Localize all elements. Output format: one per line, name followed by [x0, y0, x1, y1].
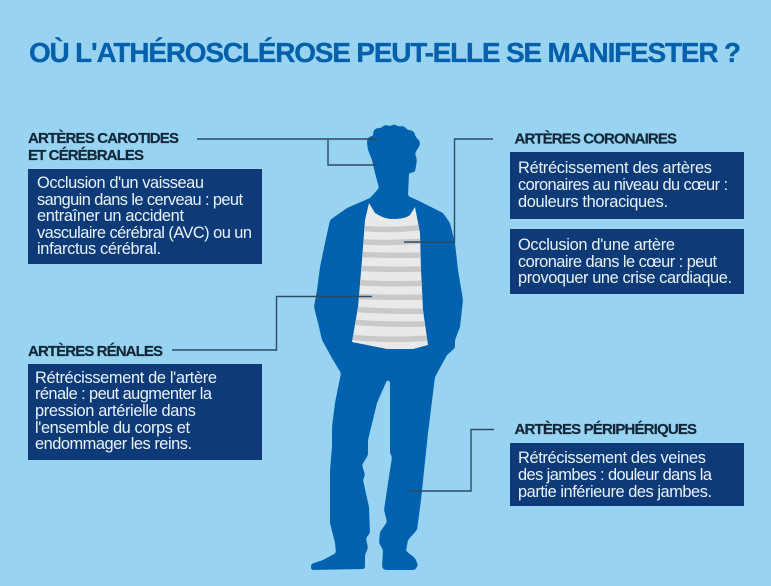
text box: carotid: vasculaire cérébral (AVC) ou un: [37, 224, 252, 242]
text box: peripheral: Rétrécissement des veines: [518, 449, 706, 467]
text box: coronary occlusion: provoquer une crise cardiaque.: [518, 269, 732, 287]
body silhouette: [311, 124, 463, 570]
heading: carotid: ET CÉRÉBRALES: [28, 147, 144, 164]
text box: renal: pression artérielle dans: [35, 402, 196, 420]
text box: peripheral: des jambes : douleur dans la: [518, 466, 713, 484]
text box: renal: l'ensemble du corps et: [35, 419, 190, 437]
heading: renal: ARTÈRES RÉNALES: [28, 343, 163, 360]
text box: renal: endommager les reins.: [35, 435, 192, 453]
human silhouette figure: [311, 124, 463, 570]
text box: carotid: entraîner un accident: [37, 207, 184, 225]
heading: coronary: ARTÈRES CORONAIRES: [514, 130, 677, 148]
text box: carotid: [28, 169, 262, 264]
panel: coronary arteries: [510, 130, 744, 294]
heading: carotid: ARTÈRES CAROTIDES: [28, 130, 179, 147]
connector: carotid arteries: [197, 139, 378, 165]
text box: coronary occlusion: [510, 229, 744, 294]
heading: carotid: [28, 130, 179, 164]
text box: renal: [28, 364, 262, 460]
text box: peripheral: partie inférieure des jambes.: [518, 483, 712, 501]
text box: renal: rénale : peut augmenter la: [35, 385, 213, 403]
panel: renal arteries: [28, 343, 262, 460]
panel: peripheral arteries: [510, 421, 744, 506]
connector: peripheral arteries: [407, 430, 494, 491]
title: OÙ L'ATHÉROSCLÉROSE PEUT-ELLE SE MANIFESTER ?: [29, 37, 741, 68]
text box: peripheral: [510, 443, 744, 506]
text box: carotid: sanguin dans le cerveau : peut: [37, 191, 243, 209]
striped shirt: [352, 203, 428, 349]
text box: coronary occlusion: Occlusion d'une artère: [518, 236, 675, 254]
heading: peripheral: ARTÈRES PÉRIPHÉRIQUES: [514, 421, 697, 438]
text box: coronary narrowing: Rétrécissement des artères: [518, 159, 712, 177]
connector: renal arteries: [172, 296, 372, 350]
panel: carotid and cerebral arteries: [28, 130, 262, 264]
connector: coronary arteries: [404, 139, 493, 242]
text box: carotid: Occlusion d'un vaisseau: [37, 174, 204, 192]
text box: renal: Rétrécissement de l'artère: [35, 369, 217, 387]
text box: carotid: infarctus cérébral.: [37, 240, 161, 258]
text box: coronary narrowing: douleurs thoraciques.: [518, 193, 668, 211]
text box: coronary narrowing: [510, 152, 744, 219]
text box: coronary occlusion: coronaire dans le cœur : peut: [518, 253, 717, 271]
text box: coronary narrowing: coronaires au niveau du cœur :: [518, 176, 728, 194]
